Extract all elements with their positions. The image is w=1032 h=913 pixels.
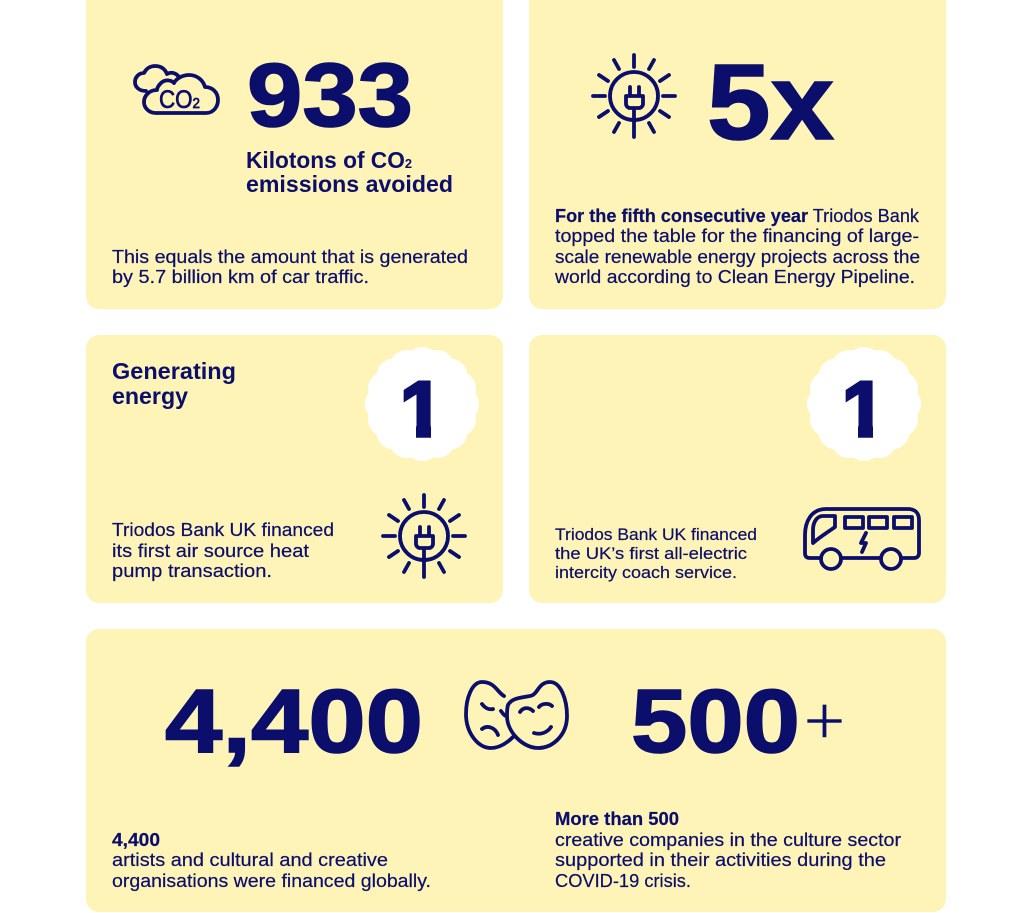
heading: generating energy — [112, 358, 236, 409]
text: all-electric intercity coach: Triodos Bank UK financed — [555, 525, 757, 544]
text: air source heat pump — [112, 520, 334, 581]
subheading: kilotons of CO2 emissions avoided: Kilotons of CO2 — [246, 147, 412, 173]
text: 4,400 artists — [112, 830, 431, 891]
text: more than 500: supported in their activities during the — [555, 850, 886, 870]
panel: generating energy — [86, 335, 503, 603]
panel: CO2 emissions avoided — [86, 0, 503, 309]
icon: CO2 clouds: CO2 — [159, 86, 200, 114]
panel: 5x renewable financing — [529, 0, 946, 309]
icon: CO2 clouds — [135, 66, 218, 114]
text: all-electric intercity coach: intercity coach service. — [555, 563, 737, 582]
big number: 933: 933 — [247, 46, 413, 146]
big number: 500+: 500 — [631, 672, 800, 772]
text: more than 500: COVID-19 crisis. — [555, 871, 691, 891]
heading: generating energy: Generating — [112, 358, 236, 384]
text: fifth consecutive year — [554, 206, 920, 287]
subheading: kilotons of CO2 emissions avoided: emissions avoided — [246, 171, 453, 197]
big number: 5x: 5x — [707, 41, 834, 162]
text: car traffic equivalent — [112, 247, 468, 287]
text: 4,400 artists: organisations were financed globally. — [112, 871, 431, 891]
icon: sun with plug — [593, 55, 675, 137]
badge: number 1 — [807, 347, 921, 461]
text: more than 500: More than 500 — [555, 809, 679, 829]
text: air source heat pump: its first air source heat — [112, 541, 309, 561]
big number: 4,400: 4,400 — [165, 672, 423, 772]
icon: sun with plug — [383, 495, 465, 577]
badge: number 1 — [365, 347, 479, 461]
text: fifth consecutive year: topped the table for the financing of large- — [555, 226, 919, 246]
panel: electric coach — [529, 335, 946, 603]
text: car traffic equivalent: This equals the amount that is generated — [112, 247, 468, 267]
text: air source heat pump: Triodos Bank UK financed — [112, 520, 334, 540]
panel: culture sector — [86, 629, 946, 912]
text: all-electric intercity coach: the UK’s first all-electric — [555, 544, 748, 563]
text: fifth consecutive year: world according to Clean Energy Pipeline. — [554, 267, 915, 287]
icon: theatre masks — [466, 682, 567, 748]
badge: number 1: 1 — [400, 365, 443, 453]
big number: 500+: + — [803, 681, 846, 759]
big number: 500+ — [631, 672, 846, 772]
text: more than 500: creative companies in the culture sector — [555, 830, 901, 850]
text: fifth consecutive year: For the fifth consecutive year Triodos Bank — [555, 206, 920, 226]
text: all-electric intercity coach — [555, 525, 757, 582]
text: fifth consecutive year: scale renewable energy projects across the — [555, 247, 920, 267]
badge: number 1: 1 — [842, 365, 885, 453]
text: 4,400 artists: 4,400 — [112, 830, 160, 850]
text: more than 500 — [555, 809, 901, 891]
text: air source heat pump: pump transaction. — [112, 561, 272, 581]
icon: electric bus — [805, 509, 919, 569]
heading: generating energy: energy — [112, 383, 188, 409]
text: car traffic equivalent: by 5.7 billion km of car traffic. — [112, 267, 369, 287]
text: 4,400 artists: artists and cultural and creative — [112, 850, 388, 870]
subheading: kilotons of CO2 emissions avoided — [246, 147, 453, 197]
